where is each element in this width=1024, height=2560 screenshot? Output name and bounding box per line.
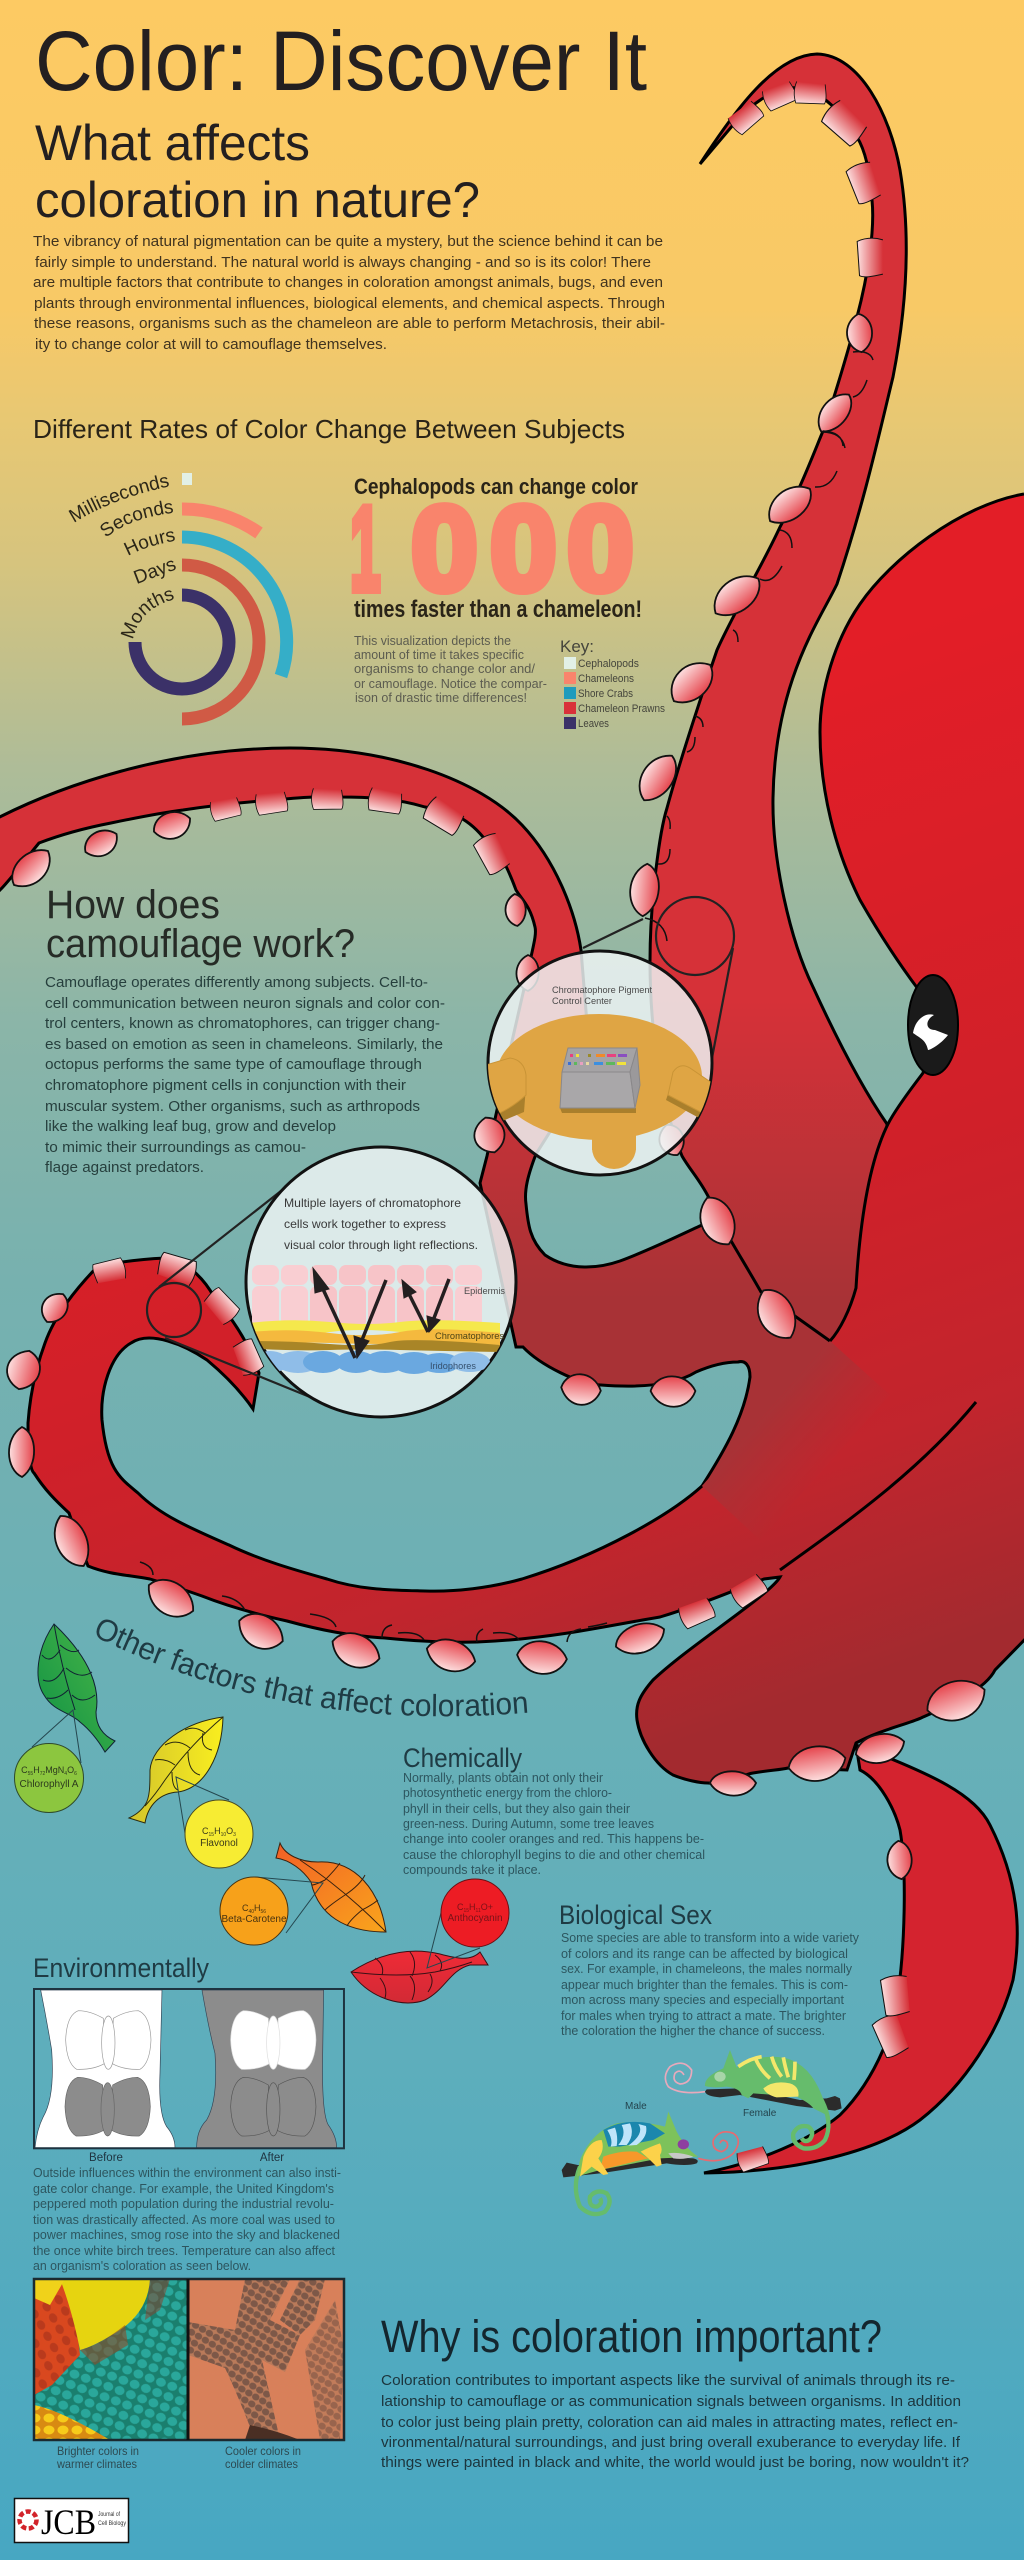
tail tentacle lower right [704, 1745, 1017, 2173]
yellow leaf with flavonol callout: C [202, 1826, 209, 1836]
chameleon labels: Female [743, 2108, 777, 2119]
heading: what affects coloration: What affects [35, 115, 310, 171]
yellow leaf with flavonol callout: H [214, 1826, 221, 1836]
environmentally paragraph: gate color change. For example, the United Kingdom's [33, 2181, 334, 2196]
chemically section [403, 1743, 705, 1877]
radial chart labels: Milliseconds [68, 475, 169, 522]
why coloration paragraph: vironmental/natural surroundings, and just bring overall exuberance to everyday life. If [381, 2434, 961, 2451]
chemically section: cause the chlorophyll begins to die and other chemical [403, 1847, 705, 1862]
body outline [28, 494, 1024, 1783]
biological sex section: Biological Sex [559, 1900, 712, 1930]
suckers on main tentacle [628, 81, 883, 1346]
callout: 1000 times faster: Cephalopods can change color [354, 474, 638, 499]
JCB logo: JCB [41, 2502, 96, 2542]
chart description: amount of time it takes specific [354, 647, 524, 662]
camouflage paragraph: trol centers, known as chromatophores, can trigger chang- [45, 1015, 440, 1032]
seconds arc [182, 509, 259, 533]
heading: how does camouflage work: How does [46, 883, 220, 927]
environmentally heading: Environmentally [33, 1953, 209, 1983]
body crease [780, 1402, 976, 1570]
legend key: Chameleons [578, 673, 634, 685]
yellow leaf with flavonol callout: Flavonol [200, 1838, 238, 1849]
layer labels [430, 1286, 505, 1372]
callout: 1000 times faster: 1 [350, 481, 381, 616]
yellow leaf with flavonol callout: 15 [209, 1832, 214, 1838]
green leaf with chlorophyll callout: H [33, 1765, 40, 1775]
camouflage paragraph: flage against predators. [45, 1159, 204, 1176]
green leaf with chlorophyll callout: O [67, 1765, 74, 1775]
legend key: Key: [560, 637, 594, 656]
chemically section: photosynthetic energy from the chloro- [403, 1785, 612, 1800]
red leaf with anthocyanin callout [351, 1879, 509, 2003]
why coloration paragraph: Coloration contributes to important aspects like the survival of animals through its re- [381, 2372, 955, 2389]
radial chart labels: Days [134, 560, 176, 584]
milliseconds marker [182, 473, 192, 485]
green leaf with chlorophyll callout: 55 [28, 1771, 33, 1777]
camouflage paragraph: cell communication between neuron signals and color con- [45, 995, 445, 1012]
intro paragraph: are multiple factors that contribute to changes in coloration amongst animals, bugs, and even [33, 274, 663, 291]
legend key: Chameleon Prawns [578, 703, 665, 715]
callout: 1000 times faster [350, 474, 642, 623]
why coloration paragraph [381, 2372, 969, 2471]
red leaf with anthocyanin callout: H [469, 1902, 476, 1912]
male chameleon [562, 2112, 738, 2214]
camouflage paragraph: muscular system. Other organisms, such as arthropods [45, 1098, 420, 1115]
intro paragraph: fairly simple to understand. The natural world is always changing - and so is its color! There [35, 254, 651, 271]
title: Color: Discover It [35, 14, 647, 108]
chemically section: phyll in their cells, but they also gain their [403, 1801, 631, 1816]
biological sex section: for males when trying to attract a mate. The brighter [561, 2008, 847, 2023]
web blending into body [702, 1341, 890, 1540]
biological sex section: appear much brighter than the females. This is com- [561, 1977, 848, 1992]
biological sex section [559, 1900, 859, 2038]
climate captions: warmer climates [56, 2457, 137, 2471]
control center label: Control Center [552, 996, 612, 1007]
yellow leaf with flavonol callout: O [226, 1826, 233, 1836]
environmentally paragraph: power machines, smog rose into the sky and blackened [33, 2227, 340, 2242]
body and lower left tentacle fill [28, 490, 1024, 1783]
intro paragraph: plants through environmental influences, biological elements, and chemical aspects. Through [34, 295, 665, 312]
red leaf with anthocyanin callout: 15 [463, 1908, 469, 1914]
callout: 1000 times faster: 000 [411, 482, 634, 616]
environmentally paragraph: Outside influences within the environment can also insti- [33, 2165, 341, 2180]
arc tentacle and web [0, 748, 900, 1500]
environmentally paragraph: the once white birch trees. Temperature can also affect [33, 2243, 335, 2258]
why coloration paragraph: lationship to camouflage or as communication signals between organisms. In addition [381, 2393, 961, 2410]
heading: different rates: Different Rates of Color Change Between Subjects [33, 414, 625, 444]
legend key: Leaves [578, 718, 609, 730]
green leaf with chlorophyll callout: MgN [45, 1765, 64, 1775]
iridophore cells [252, 1351, 490, 1374]
suckers on arc tentacle [4, 787, 539, 1156]
sucker hook lines on lower tentacle [140, 1562, 607, 1642]
diagram caption: Multiple layers of chromatophore [284, 1196, 461, 1210]
magnifier: chromatophore pigment control center [486, 897, 734, 1175]
diagram caption [284, 1196, 478, 1252]
red leaf with anthocyanin callout: 11 [476, 1908, 481, 1914]
radial chart labels: Seconds [100, 500, 173, 536]
magnifier: skin layers diagram [147, 1147, 516, 1417]
layer labels: Iridophores [430, 1361, 476, 1372]
yellow leaf with flavonol callout: 3 [233, 1832, 236, 1838]
green leaf with chlorophyll callout: 72 [40, 1771, 45, 1777]
legend key: Shore Crabs [578, 688, 633, 700]
camouflage paragraph: like the walking leaf bug, grow and develop [45, 1118, 336, 1135]
JCB logo [14, 2498, 128, 2542]
biological sex section: the coloration the higher the chance of success. [561, 2023, 825, 2038]
climate captions [56, 2444, 301, 2471]
intro paragraph: ity to change color at will to camouflage themselves. [35, 336, 387, 353]
chemically section: change into cooler oranges and red. This happens be- [403, 1831, 704, 1846]
JCB logo: Cell Biology [98, 2521, 126, 2527]
orange leaf with beta-carotene callout: Beta-Carotene [221, 1914, 287, 1925]
chemically section: compounds take it place. [403, 1862, 541, 1877]
why coloration paragraph: to color just being plain pretty, coloration can aid males in attracting mates, reflect en- [381, 2414, 958, 2431]
chart description: or camouflage. Notice the compar- [354, 676, 547, 691]
layer labels: Chromatophores [435, 1331, 504, 1342]
JCB logo: Journal of [98, 2512, 120, 2518]
biological sex section: sex. For example, in chameleons, the males normally [561, 1961, 852, 1976]
intro paragraph [33, 233, 665, 353]
chameleon labels: Male [625, 2101, 647, 2112]
before and after labels: After [260, 2152, 284, 2164]
callout: 1000 times faster: times faster than a chameleon! [354, 596, 642, 623]
red leaf with anthocyanin callout: Anthocyanin [447, 1913, 503, 1924]
days arc [182, 565, 259, 719]
suckers on lower tentacle [3, 1250, 991, 1796]
chromatophore bands [252, 1320, 500, 1334]
green leaf with chlorophyll callout: 6 [74, 1771, 77, 1777]
red leaf with anthocyanin callout: C [457, 1902, 463, 1912]
green leaf with chlorophyll callout [14, 1624, 115, 1812]
camouflage paragraph: octopus performs the same type of camouflage through [45, 1056, 422, 1073]
chemically section: Normally, plants obtain not only their [403, 1770, 604, 1785]
intro paragraph: The vibrancy of natural pigmentation can be quite a mystery, but the science behind it can be [33, 233, 663, 250]
biological sex section: of colors and its range can be affected by biological [561, 1946, 848, 1961]
control center label [552, 985, 652, 1007]
climate captions: Brighter colors in [57, 2444, 139, 2458]
control box [560, 1048, 640, 1113]
orange leaf with beta-carotene callout: H [254, 1903, 260, 1913]
reflection arrows [313, 1268, 449, 1358]
chart description: This visualization depicts the [354, 633, 511, 648]
heading: how does camouflage work [46, 883, 355, 966]
legend key [560, 637, 665, 730]
environmentally paragraph: peppered moth population during the industrial revolu- [33, 2196, 334, 2211]
camouflage paragraph: es based on emotion as seen in chameleons. Similarly, the [45, 1036, 443, 1053]
camouflage paragraph: to mimic their surroundings as camou- [45, 1139, 306, 1156]
chameleon labels [625, 2101, 777, 2119]
green leaf with chlorophyll callout: 4 [64, 1771, 67, 1777]
orange leaf with beta-carotene callout: 40 [248, 1909, 254, 1915]
chart description: ison of drastic time differences! [355, 690, 527, 705]
legend key: Cephalopods [578, 658, 639, 670]
layer labels: Epidermis [464, 1286, 505, 1297]
orange leaf with beta-carotene callout: C [242, 1903, 248, 1913]
radial chart: rates of color change [135, 473, 287, 719]
diagram caption: visual color through light reflections. [284, 1238, 478, 1252]
orange leaf with beta-carotene callout: 56 [260, 1909, 266, 1915]
yellow leaf with flavonol callout: 10 [221, 1832, 226, 1838]
hours arc [182, 537, 287, 676]
radial chart labels [68, 475, 176, 638]
female chameleon [665, 2050, 842, 2149]
before and after labels: Before [89, 2152, 123, 2164]
sucker hook lines on main tentacle [645, 352, 873, 941]
main upper tentacle [650, 54, 906, 1345]
climate captions: Cooler colors in [225, 2444, 301, 2458]
radial chart labels: Months [120, 590, 174, 638]
chemically section: Chemically [403, 1743, 522, 1773]
chemically section: green-ness. During Autumn, some tree leaves [403, 1816, 654, 1831]
diagram caption: cells work together to express [284, 1217, 446, 1231]
control center label: Chromatophore Pigment [552, 985, 652, 996]
heading: what affects coloration: coloration in nature? [35, 172, 480, 228]
camouflage paragraph: chromatophore pigment cells in conjunction with their [45, 1077, 406, 1094]
peppered moth before and after panel [34, 1989, 344, 2164]
green leaf with chlorophyll callout: Chlorophyll A [20, 1779, 79, 1790]
months arc [135, 595, 229, 689]
heading: how does camouflage work: camouflage work? [46, 922, 355, 966]
epidermis cells [252, 1265, 482, 1328]
biological sex section: Some species are able to transform into a wide variety [561, 1930, 859, 1945]
why coloration paragraph: things were painted in black and white, the world would just be boring, now wouldn't it? [381, 2454, 969, 2471]
before and after labels [89, 2152, 284, 2164]
red leaf with anthocyanin callout: O+ [481, 1902, 493, 1912]
why coloration heading: Why is coloration important? [381, 2311, 882, 2362]
environmentally paragraph [33, 2165, 341, 2273]
camouflage paragraph: Camouflage operates differently among subjects. Cell-to- [45, 974, 428, 991]
orange leaf with beta-carotene callout [220, 1843, 386, 1945]
intro paragraph: these reasons, organisms such as the chameleon are able to perform Metachrosis, their abil- [34, 315, 665, 332]
heading: what affects coloration [35, 115, 480, 228]
yellow leaf with flavonol callout [129, 1717, 253, 1868]
green leaf with chlorophyll callout: C [21, 1765, 28, 1775]
chart description [354, 633, 547, 705]
radial chart labels: Hours [124, 531, 175, 556]
environmentally paragraph: tion was drastically affected. As more coal was used to [33, 2212, 335, 2227]
climate texture panels [34, 2279, 344, 2440]
eye [908, 975, 958, 1075]
environmentally paragraph: an organism's coloration as seen below. [33, 2258, 251, 2273]
curved heading: other factors: Other factors that affect coloration [96, 1620, 528, 1716]
camouflage paragraph [45, 974, 445, 1176]
chart description: organisms to change color and/ [354, 661, 535, 676]
climate captions: colder climates [225, 2457, 298, 2471]
biological sex section: mon across many species and especially important [561, 1992, 844, 2007]
